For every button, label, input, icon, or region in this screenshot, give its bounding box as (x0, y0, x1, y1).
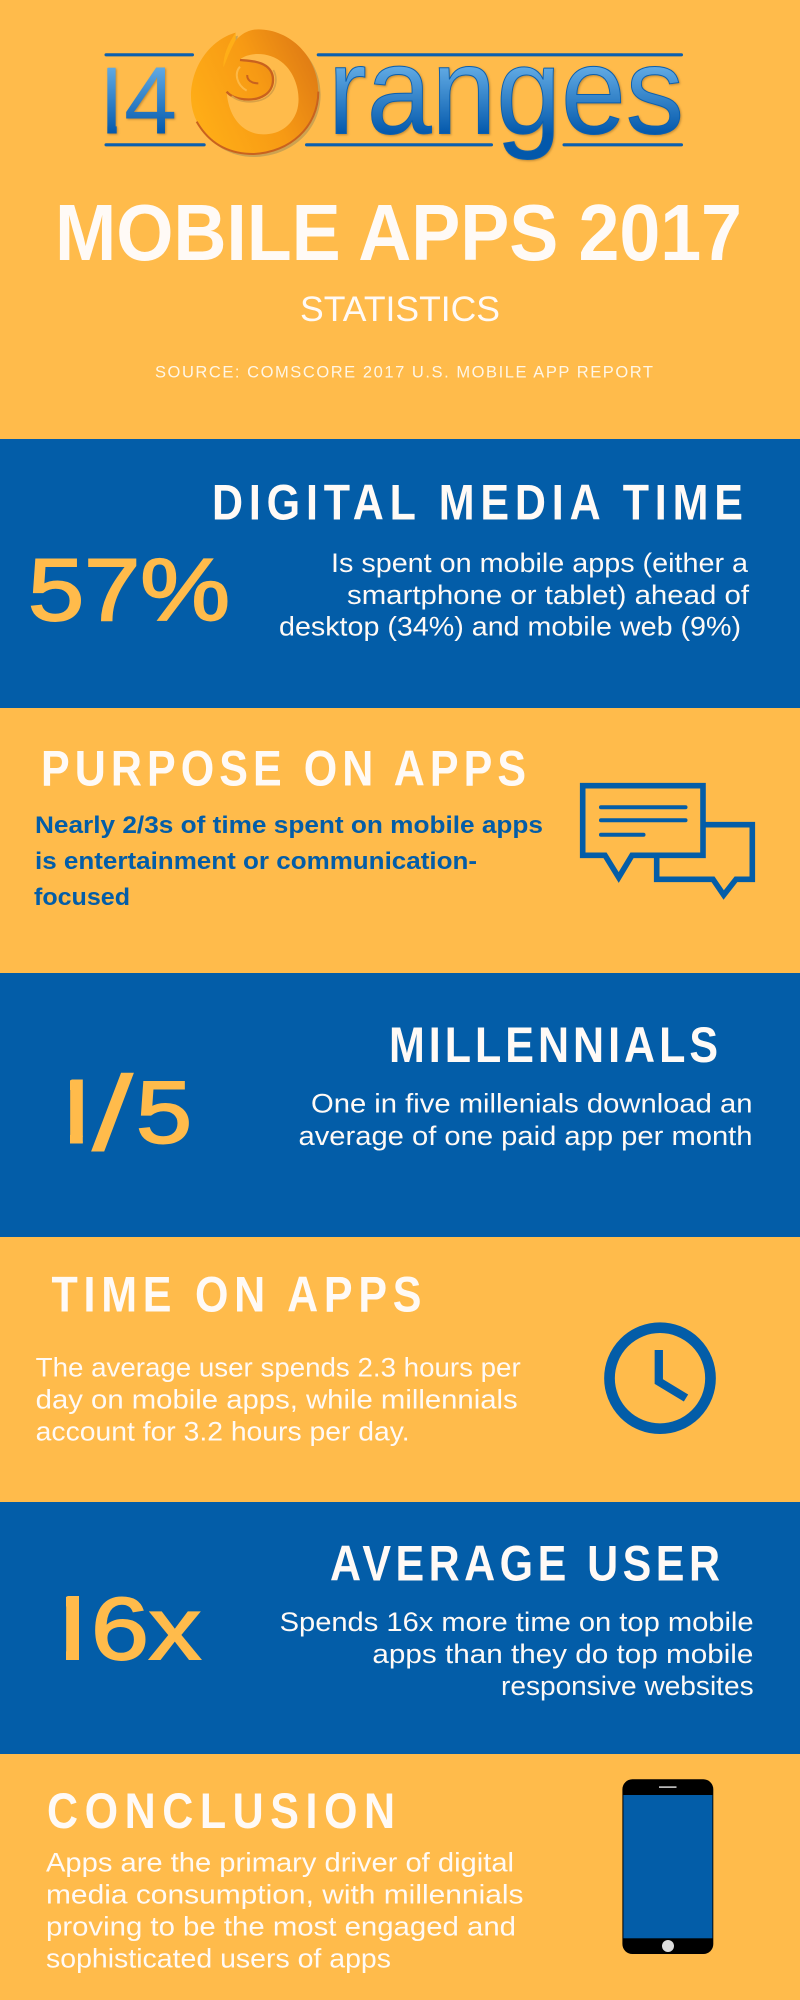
icon: smartphone (622, 1779, 713, 1954)
description (36, 1353, 521, 1447)
subtitle: STATISTICS (300, 290, 500, 329)
description: One in five millenials download an (311, 1088, 752, 1118)
icon: chat bubbles (583, 786, 752, 895)
description: The average user spends 2.3 hours per (36, 1353, 521, 1383)
heading: MILLENNIALS (389, 1017, 718, 1073)
heading: CONCLUSION (47, 1783, 395, 1839)
description: media consumption, with millennials (46, 1880, 524, 1910)
description: smartphone or tablet) ahead of (347, 580, 750, 610)
logo: 14 Oranges: 1 (83, 47, 136, 154)
logo: 14 Oranges: 4 (124, 47, 177, 154)
big number 1/5: 1 (42, 1062, 107, 1162)
description: account for 3.2 hours per day. (36, 1417, 410, 1447)
description: Is spent on mobile apps (either a (331, 548, 749, 578)
panel: conclusion (0, 1754, 800, 2000)
source line: SOURCE: COMSCORE 2017 U.S. MOBILE APP REPORT (155, 364, 653, 382)
big number 1/5 (70, 1072, 189, 1152)
description (34, 812, 543, 911)
panel: average user (0, 1502, 800, 1754)
heading: TIME ON APPS (52, 1266, 421, 1322)
description: responsive websites (501, 1671, 754, 1701)
description: apps than they do top mobile (372, 1639, 753, 1669)
panel: digital media time (0, 439, 800, 708)
description: desktop (34%) and mobile web (9%) (279, 612, 741, 642)
description: sophisticated users of apps (46, 1944, 391, 1974)
description: is entertainment or communication- (35, 848, 477, 875)
description (280, 1607, 754, 1701)
big number 16x (66, 1596, 202, 1661)
description (298, 1088, 752, 1151)
big number 1/5: / (92, 1055, 134, 1173)
heading: DIGITAL MEDIA TIME (212, 474, 743, 530)
description (46, 1848, 524, 1974)
big number 57%: 57% (28, 540, 230, 639)
big number 16x: 1 (38, 1579, 103, 1679)
logo: 14 Oranges (83, 22, 684, 160)
description: Spends 16x more time on top mobile (280, 1607, 754, 1637)
icon: clock (610, 1328, 710, 1429)
title: MOBILE APPS 2017 (55, 188, 742, 278)
description: average of one paid app per month (298, 1121, 752, 1151)
panel: time on apps (0, 1237, 800, 1502)
panel: millennials (0, 973, 800, 1237)
heading: PURPOSE ON APPS (41, 740, 526, 796)
panel: purpose on apps (0, 708, 800, 973)
description (279, 548, 750, 642)
big number 1/5: 5 (136, 1062, 192, 1162)
heading: AVERAGE USER (330, 1536, 720, 1591)
icon: orange peel spiral (191, 29, 321, 157)
description: proving to be the most engaged and (46, 1912, 516, 1942)
panel: header (60, 29, 739, 378)
logo: 14 Oranges: ranges (328, 22, 684, 160)
big number 16x: 6x (91, 1579, 201, 1678)
description: day on mobile apps, while millennials (36, 1385, 518, 1415)
description: Nearly 2/3s of time spent on mobile apps (35, 812, 543, 839)
description: Apps are the primary driver of digital (46, 1848, 514, 1878)
description: focused (34, 884, 130, 911)
